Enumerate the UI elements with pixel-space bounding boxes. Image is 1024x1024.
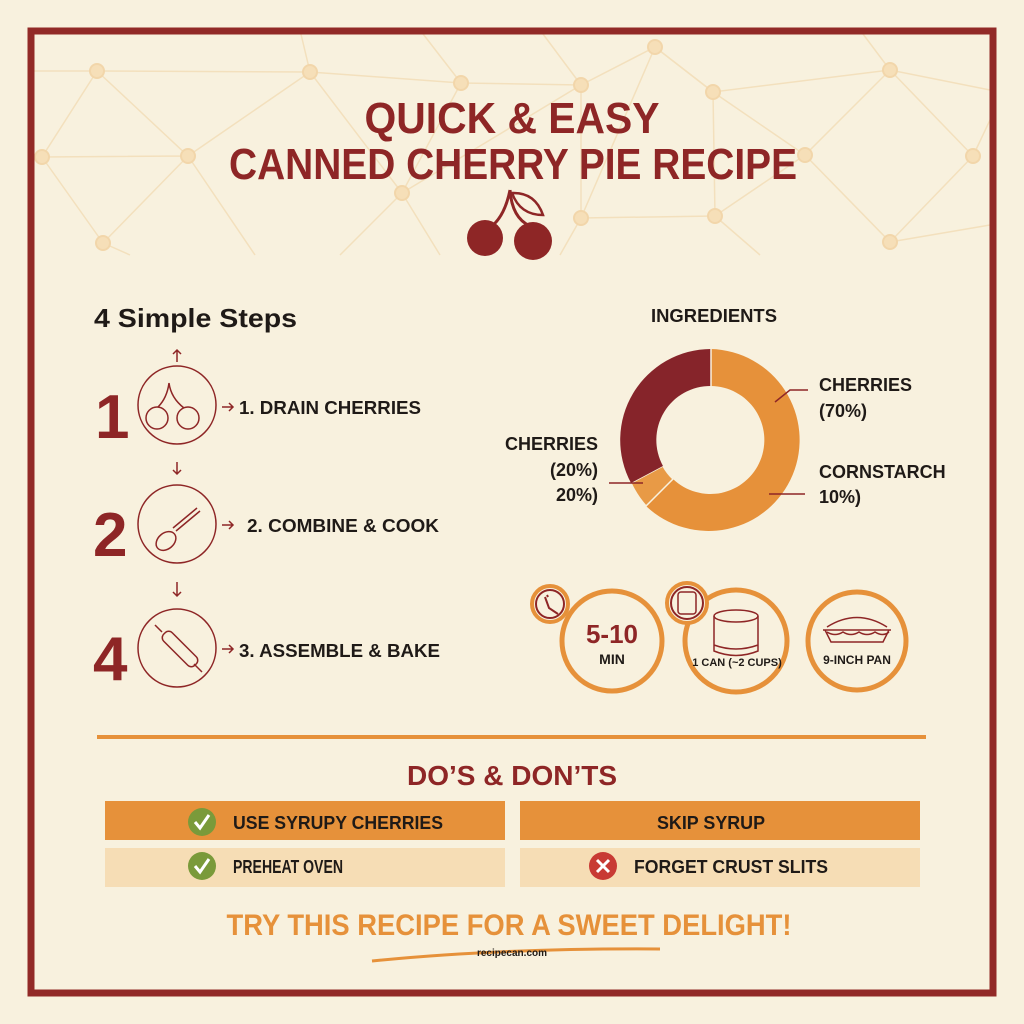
do's and don'ts table: USE SYRUPY CHERRIES	[233, 813, 443, 833]
do's and don'ts table: PREHEAT OVEN	[233, 857, 343, 877]
step 4: 4	[93, 625, 128, 694]
stat: pan	[808, 592, 906, 690]
title: QUICK & EASY	[364, 94, 660, 143]
heading: 4 simple steps: 4 Simple Steps	[94, 303, 297, 333]
step 2	[93, 485, 439, 570]
stat: time: 5-10	[586, 619, 638, 649]
do's and don'ts table: FORGET CRUST SLITS	[634, 857, 828, 877]
divider line	[97, 735, 926, 739]
stat: pan: 9-INCH PAN	[823, 653, 891, 667]
donut chart: CHERRIES	[819, 375, 912, 395]
donut chart: CHERRIES	[505, 434, 598, 454]
stat: can: 1 CAN (~2 CUPS)	[692, 657, 782, 669]
do's and don'ts table: SKIP SYRUP	[657, 813, 765, 833]
donut chart: CORNSTARCH	[819, 462, 946, 482]
donut chart: 20%)	[556, 485, 598, 505]
do's and don'ts table	[105, 801, 920, 887]
step 1: 1. DRAIN CHERRIES	[239, 398, 421, 418]
step 1: 1	[95, 383, 129, 452]
heading: do's & don'ts: DO’S & DON’TS	[407, 760, 617, 791]
donut chart: (70%)	[819, 401, 867, 421]
title	[229, 94, 797, 189]
title: CANNED CHERRY PIE RECIPE	[229, 140, 797, 189]
donut chart: (20%)	[550, 460, 598, 480]
step 4	[93, 609, 440, 694]
call to action: TRY THIS RECIPE FOR A SWEET DELIGHT!	[226, 909, 792, 942]
donut chart	[505, 349, 946, 531]
step 2: 2. COMBINE & COOK	[247, 516, 439, 536]
stat: can	[667, 583, 787, 692]
step 4: 3. ASSEMBLE & BAKE	[239, 641, 440, 661]
step 2: 2	[93, 501, 127, 570]
step 1	[95, 366, 421, 452]
stat: time: MIN	[599, 651, 625, 667]
steps list	[93, 350, 440, 694]
donut chart: 10%)	[819, 487, 861, 507]
heading: ingredients: INGREDIENTS	[651, 306, 777, 326]
icon: cherries	[467, 190, 552, 260]
stat: time	[532, 586, 662, 691]
footer url: recipecan.com	[477, 948, 547, 959]
